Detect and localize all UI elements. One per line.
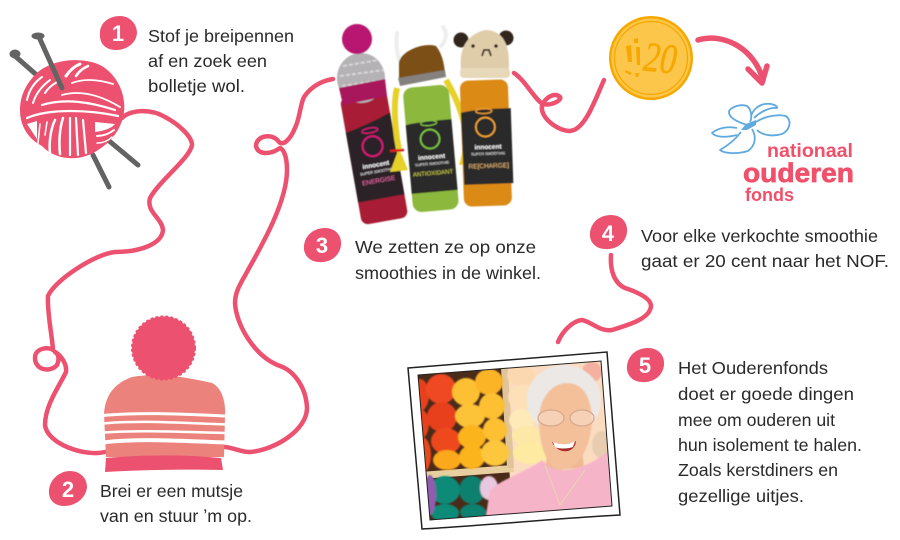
text: step 3: smoothies in de winkel. [355,263,541,283]
icon: knitted hat [103,316,226,472]
badge 3: 3 [316,233,328,258]
text: step 1 [148,26,294,96]
needle lower right [108,140,138,165]
text: step 1: af en zoek een [148,51,267,71]
logo wordmark: nationaal [767,141,853,162]
yarn string: hat to bottles [224,79,333,452]
text: step 5: gezellige uitjes. [678,486,804,506]
logo: Nationaal Ouderenfonds [712,104,854,205]
photo frame [408,352,620,529]
text: step 2: Brei er een mutsje [100,481,243,501]
badge 5: 5 [639,353,651,378]
text: step 5 [678,358,862,506]
bottle: antioxidant [403,84,459,213]
text: step 3 [355,237,541,283]
text: step 2: van en stuur ʼm op. [100,506,252,526]
hat: grey beanie [337,24,387,105]
bottle: recharge: SUPER SMOOTHIE [471,151,506,157]
needle back left [15,56,48,85]
badge 3 [304,228,341,262]
bottle: recharge [460,79,514,207]
text: step 5: mee om ouderen uit [678,410,835,430]
logo: Nationaal Ouderenfonds: ouderen [743,158,854,188]
badge 4: 4 [602,221,615,246]
text: step 4: Voor elke verkochte smoothie [641,226,878,246]
text: step 5: Zoals kerstdiners en [678,460,838,480]
smoothie bottles with knitted hats [337,24,514,225]
photo inner border [418,361,612,520]
needle front [39,37,62,88]
yarn string: bottles to coin [514,73,604,131]
hat white stripes [103,414,226,442]
text: step 4: gaat er 20 cent naar het NOF. [641,251,889,271]
hat body [104,375,225,457]
hat: bear [454,30,514,78]
bottle: recharge: innocent [474,143,503,151]
yarn string: step 4 to photo [558,255,651,342]
coin marks [625,38,640,77]
face [539,383,592,470]
text: step 5: Het Ouderenfonds [678,358,828,378]
needle lower [93,155,109,187]
bottle: antioxidant: innocent [418,153,446,162]
text: step 1: Stof je breipennen [148,26,294,46]
glasses [538,410,594,426]
white yarn strands [27,64,120,155]
yarn string: ball to hat [35,111,192,453]
bottle: energise: innocent [362,159,391,171]
logo: Nationaal Ouderenfonds: fonds [745,185,794,205]
badge 2 [49,471,87,506]
icon: 20 cent coin [609,16,693,100]
text: step 5: hun isolement te halen. [678,435,862,455]
necklace [545,465,585,505]
text: step 2 [100,481,252,526]
badge 2: 2 [62,477,74,502]
bottle: energise: SUPER SMOOTHIE [360,167,395,177]
bottle: energise [340,90,408,225]
text: step 5: doet er goede dingen [678,384,854,404]
text: step 4 [641,226,889,271]
hat brim [105,455,223,472]
hat: viking helmet with braids [390,27,477,172]
badge 4 [590,215,627,249]
photo background [418,369,510,520]
icon: 20 cent coin: 20 [641,34,679,84]
bottle: recharge: RE[CHARGE] [468,162,509,171]
arrow [698,38,767,83]
pompom [132,316,195,380]
badge 1 [100,16,137,50]
photo: laughing elderly woman with wool [408,352,620,529]
icon: ball of wool with needles [10,32,138,187]
bottle: antioxidant: SUPER SMOOTHIE [415,160,450,167]
logo flower [712,104,789,153]
bottle: energise: ENERGISE [362,175,397,188]
badge 1: 1 [112,21,124,46]
bottle: antioxidant: ANTIOXIDANT [413,169,454,179]
hair [526,364,602,426]
wool balls [411,362,616,522]
smile [552,441,576,451]
text: step 1: bolletje wol. [148,76,245,96]
neck [546,456,584,470]
ball [20,60,124,158]
text: step 3: We zetten ze op onze [355,237,536,257]
sweater [484,452,612,516]
white wedge [27,121,37,139]
badge 5 [627,348,664,382]
